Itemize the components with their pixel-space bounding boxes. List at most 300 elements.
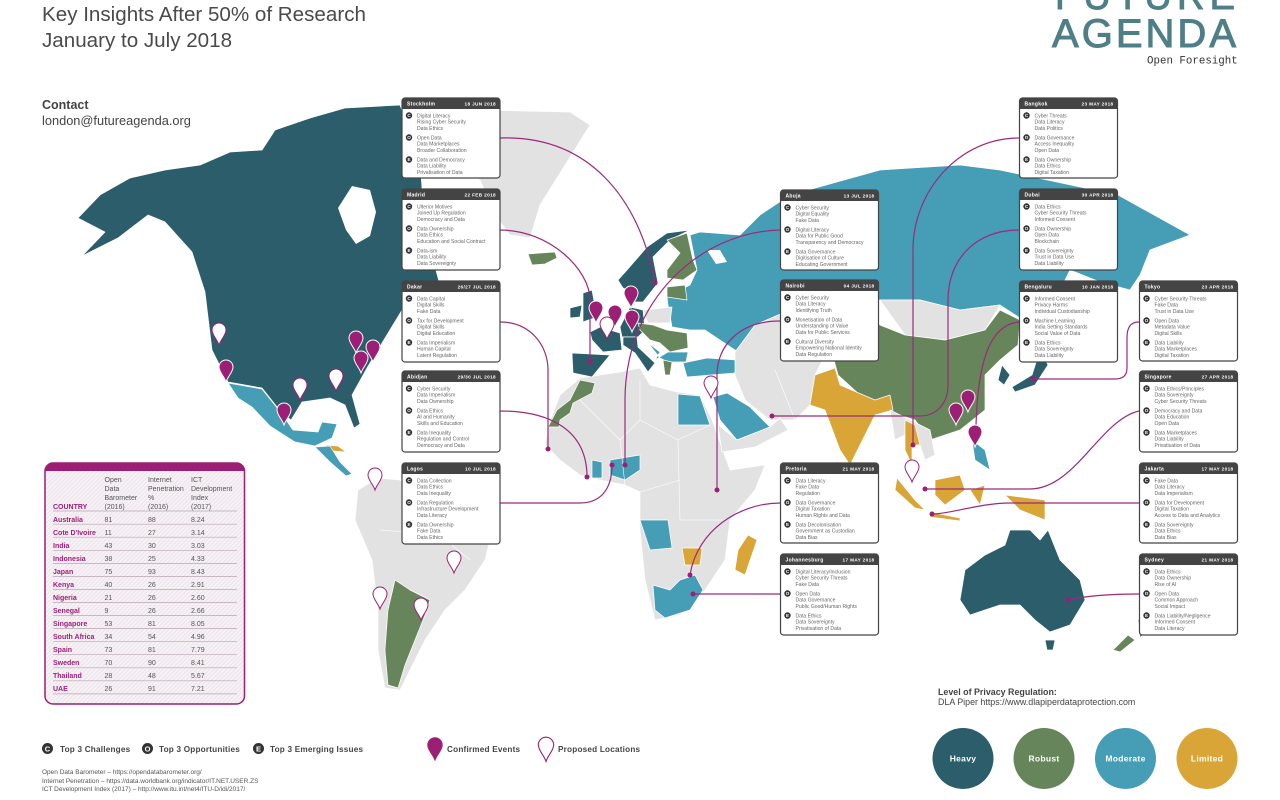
region: France	[590, 327, 622, 352]
region: New Zealand	[1113, 618, 1148, 652]
panel: Jakarta: Fake Data	[1154, 478, 1178, 484]
panel: Jakarta: C	[1145, 478, 1149, 483]
panel: country data table: Internet	[148, 477, 172, 484]
panel: Nairobi: Data for Public Services	[796, 330, 850, 336]
region: Zimbabwe	[682, 548, 702, 565]
panel: Tokyo: Trust in Data Use	[1154, 309, 1194, 315]
legend: pin types	[427, 737, 641, 761]
panel: Singapore: 27 APR 2018	[1202, 375, 1234, 380]
panel: Stockholm: Data Ethics	[417, 126, 443, 132]
panel: Madrid: Data Liability	[417, 255, 447, 261]
region: Indonesia	[895, 475, 1045, 521]
panel: Bangkok: Data Ownership	[1034, 157, 1071, 163]
panel: Sydney: O	[1145, 591, 1149, 596]
region: India	[810, 368, 893, 465]
panel: country data table: 43	[104, 543, 112, 550]
panel: country data table	[45, 463, 244, 704]
panel: country data table: Sweden	[53, 660, 79, 667]
legend: Robust	[1014, 728, 1074, 789]
panel: Dakar: Data Capital	[417, 296, 445, 302]
panel: Lagos: Data Ethics	[417, 485, 443, 491]
panel: Dakar: Digital Skills	[417, 325, 445, 331]
panel: Tokyo	[1140, 281, 1238, 361]
panel: Madrid: E	[407, 248, 411, 253]
panel: Nairobi: 04 JUL 2018	[844, 284, 875, 289]
panel: country data table: 75	[104, 569, 112, 576]
panel: Sydney: C	[1145, 569, 1149, 574]
panel: Madrid: Ulterior Motives	[417, 204, 453, 210]
panel: Bangkok	[1020, 98, 1118, 178]
panel: Tokyo: Fake Data	[1154, 303, 1178, 309]
region: Middle East and Central Asia	[735, 295, 860, 420]
panel: country data table: 34	[104, 634, 112, 641]
panel: Bangkok: Cyber Threats	[1034, 113, 1067, 119]
panel: Tokyo: 23 APR 2018	[1202, 285, 1234, 290]
panel: country data table: 38	[104, 556, 112, 563]
panel: Singapore: Data Marketplaces	[1154, 430, 1197, 436]
contact	[42, 98, 191, 128]
panel: country data table: 28	[104, 673, 112, 680]
title: January to July 2018	[42, 29, 232, 52]
panel: country data table: 48	[148, 673, 156, 680]
panel: Bengaluru: E	[1025, 340, 1028, 345]
panel: Bengaluru: Bengaluru	[1024, 285, 1052, 291]
panel: country data table: %	[148, 495, 154, 502]
panel: Pretoria: Government as Custodian	[796, 529, 855, 535]
panel: country data table: 26	[148, 582, 156, 589]
panel: Lagos: Data Ethics	[417, 535, 443, 541]
panel: country data table: Penetration	[148, 486, 184, 493]
panel: Lagos: 10 JUL 2018	[465, 467, 496, 472]
region: Spain	[572, 353, 610, 377]
panel: Nairobi: Cyber Security	[796, 295, 829, 301]
panel: Dubai: 30 APR 2018	[1082, 193, 1114, 198]
panel: country data table: 4.33	[191, 556, 205, 563]
region: Morocco	[548, 380, 595, 427]
panel: Abuja	[780, 190, 878, 270]
panel: Madrid: Data Sovereignty	[417, 261, 457, 267]
panel: Madrid: Madrid	[407, 193, 425, 199]
panel: country data table: 8.24	[191, 517, 205, 524]
panel: Lagos	[402, 463, 500, 544]
panel: Dakar: E	[407, 340, 411, 345]
region: Poland and Baltics	[643, 307, 672, 323]
panel: Lagos: C	[407, 478, 411, 483]
panel: Stockholm: E	[407, 157, 411, 162]
panel: Stockholm	[402, 98, 500, 178]
footnotes: sources: Open Data Barometer – https://opendatabarometer.org/	[42, 769, 202, 776]
panel: Nairobi: E	[786, 339, 789, 344]
panel: Pretoria: Regulation	[796, 491, 820, 497]
panel: Lagos: E	[407, 522, 411, 527]
panel: Nairobi: O	[786, 317, 790, 322]
panel: Abuja: 13 JUL 2018	[844, 194, 875, 199]
panel: country data table: 91	[148, 686, 156, 693]
title: Key Insights After 50% of Research	[42, 3, 366, 26]
panel: Lagos: Infrastructure Development	[417, 507, 479, 513]
panel: Dubai: E	[1025, 248, 1028, 253]
panel: country data table: 26	[148, 595, 156, 602]
panel: country data table: 8.41	[191, 660, 205, 667]
region: Ireland	[570, 305, 582, 318]
panel: country data table: 11	[104, 530, 112, 537]
panel: Nairobi	[780, 280, 878, 361]
panel: country data table: 90	[148, 660, 156, 667]
panel: Bangkok: O	[1025, 135, 1029, 140]
panel: Johannesburg: Data Governance	[796, 598, 836, 604]
panel: Bengaluru: 10 JAN 2018	[1082, 285, 1114, 290]
panel: Singapore: Data Ethics/Principles	[1154, 386, 1204, 392]
region: Cote d'Ivoire	[592, 460, 602, 478]
contact: london@futureagenda.org	[42, 113, 191, 128]
panel: country data table: 81	[148, 621, 156, 628]
panel: Lagos: Data Ownership	[417, 522, 454, 528]
panel: Bangkok: Data Governance	[1034, 135, 1075, 141]
panel: Dakar: 26/27 JUL 2018	[458, 285, 496, 290]
region: Iceland	[528, 252, 557, 265]
panel: Bangkok: E	[1025, 157, 1028, 162]
panel: Dakar: O	[407, 318, 411, 323]
region: Egypt	[678, 394, 710, 425]
panel: Lagos: Fake Data	[417, 529, 441, 535]
panel: country data table: 8.43	[191, 569, 205, 576]
panel: Pretoria: O	[786, 500, 790, 505]
panel: Nairobi: Cultural Diversity	[796, 339, 834, 345]
panel: Jakarta: Data Ethics	[1154, 529, 1181, 535]
panel: Sydney: Informed Consent	[1154, 620, 1196, 626]
panel: country data table: 5.67	[191, 673, 205, 680]
panel: country data table: Senegal	[53, 608, 80, 615]
panel: Abidjan: Cyber Security	[417, 386, 451, 392]
panel: Madrid: Joined Up Regulation	[417, 211, 466, 217]
panel: Sydney: Data Ownership	[1154, 576, 1191, 582]
panel: Singapore: Cyber Security Threats	[1154, 399, 1207, 405]
panel: Bangkok: Access Inequality	[1034, 142, 1075, 148]
panel: Dakar: Human Capital	[417, 347, 451, 353]
panel: Bengaluru: O	[1025, 318, 1029, 323]
panel: Stockholm: Rising Cyber Security	[417, 120, 466, 126]
panel: Abuja: O	[786, 227, 790, 232]
panel: Tokyo: E	[1145, 340, 1148, 345]
panel: Abidjan: Data Ethics	[417, 408, 443, 414]
panel: Jakarta: O	[1145, 500, 1149, 505]
panel: Pretoria: C	[786, 478, 790, 483]
panel: Bengaluru: Data Liability	[1034, 353, 1064, 359]
panel: Jakarta: Jakarta	[1144, 467, 1164, 473]
world map	[78, 105, 1190, 690]
panel: Tokyo: Data Marketplaces	[1154, 347, 1197, 353]
panel: Pretoria: Data Decolonisation	[796, 522, 841, 528]
panel: Johannesburg: Fake Data	[796, 582, 819, 588]
logo: Future Agenda: Open Foresight	[1147, 56, 1238, 68]
region: Greenland	[430, 110, 590, 238]
panel: Nairobi: Monetisation of Data	[796, 317, 842, 323]
legend: Top 3 categories	[42, 743, 363, 754]
legend: Limited	[1176, 728, 1238, 789]
panel: Dakar: Digital Skills	[417, 303, 445, 309]
region: Central Europe	[638, 323, 688, 352]
panel: Johannesburg: Privatisation of Data	[796, 626, 841, 632]
legend: Top 3 categories: Top 3 Opportunities	[159, 745, 240, 754]
panel: Stockholm: C	[407, 113, 411, 118]
panel: Jakarta: 17 MAY 2018	[1202, 467, 1234, 472]
panel: Singapore	[1140, 371, 1238, 452]
panel: Sydney: Data Literacy	[1154, 626, 1185, 632]
panel: Johannesburg: Open Data	[796, 591, 820, 597]
panel: Johannesburg	[780, 554, 878, 635]
panel: Sydney: Open Data	[1154, 591, 1179, 597]
panel: Bengaluru: Data Ethics	[1034, 340, 1061, 346]
panel: Madrid: C	[407, 204, 411, 209]
region: Southeast Asia	[890, 410, 935, 460]
panel: country data table: 70	[104, 660, 112, 667]
panel: Sydney: E	[1145, 613, 1148, 618]
panel: Jakarta: Data for Development	[1154, 500, 1205, 506]
panel: Abuja: C	[786, 205, 790, 210]
panel: Singapore: Open Data	[1154, 421, 1179, 427]
panel: country data table: 7.21	[191, 686, 205, 693]
panel: Pretoria: Data Governance	[796, 500, 836, 506]
panel: Bangkok: Bangkok	[1024, 102, 1048, 108]
panel: Nairobi: Empowering National Identity	[796, 346, 862, 352]
region: China	[830, 305, 1020, 440]
panel: Sydney: Rise of AI	[1154, 582, 1176, 588]
panel: Madrid: Data Ownership	[417, 226, 454, 232]
panel: Jakarta	[1140, 463, 1238, 543]
panel: country data table: 27	[148, 530, 156, 537]
panel: country data table: Australia	[53, 517, 83, 524]
panel: Jakarta: Digital Taxation	[1154, 507, 1189, 513]
panel: Sydney: Social Impact	[1154, 604, 1186, 610]
panel: country data table: South Africa	[53, 634, 94, 641]
panel: Lagos: Lagos	[407, 467, 423, 473]
connector lines from boxes to cities	[500, 138, 1139, 602]
legend: Top 3 categories: O	[145, 744, 151, 753]
panel: Abidjan: Skills and Education	[417, 421, 463, 427]
region: Balkans	[648, 343, 688, 362]
legend: Robust: Robust	[1028, 754, 1060, 764]
panel: Sydney: Common Approach	[1154, 598, 1198, 604]
panel: Tokyo: Tokyo	[1144, 285, 1160, 291]
panel: country data table: 2.60	[191, 595, 205, 602]
panel: Stockholm: Digital Literacy	[417, 113, 451, 119]
panel: country data table: Development	[191, 486, 232, 493]
region: Greece	[663, 360, 672, 375]
panel: Abidjan: 29/30 JUL 2018	[458, 375, 496, 380]
panel: Sydney: Data Liability/Negligence	[1154, 613, 1211, 619]
panel: Tokyo: Data Liability	[1154, 340, 1184, 346]
panel: Bengaluru: Data Sovereignty	[1034, 347, 1074, 353]
panel: country data table: Data	[104, 486, 119, 493]
region: Turkey	[683, 358, 737, 377]
panel: Tokyo: Cyber Security Threats	[1154, 296, 1207, 302]
panel: Nairobi: Nairobi	[786, 284, 805, 290]
legend: Limited: Limited	[1191, 754, 1223, 764]
panel: Pretoria: Data Literacy	[796, 478, 826, 484]
panel: Johannesburg: Public Good/Human Rights	[796, 604, 857, 610]
panel: Dakar: Tax for Development	[417, 318, 464, 324]
panel: country data table: Indonesia	[53, 556, 86, 563]
panel: country data table: 2.91	[191, 582, 205, 589]
panel: Sydney: Data Ethics	[1154, 569, 1181, 575]
region: Scandinavia	[618, 230, 690, 302]
title	[42, 3, 366, 52]
panel: Sydney: Sydney	[1144, 558, 1164, 564]
region: Russia and Eastern Europe	[667, 165, 1190, 357]
panel: country data table: 93	[148, 569, 156, 576]
logo: Future Agenda	[1052, 0, 1238, 68]
region: Central America	[315, 446, 352, 476]
panel: Bangkok: 23 MAY 2018	[1082, 102, 1114, 107]
panel: Jakarta: Access to Data and Analytics	[1154, 513, 1221, 519]
panel: Bengaluru: Individual Custodianship	[1034, 309, 1090, 315]
region: South America	[355, 478, 490, 690]
panel: country data table: 9	[104, 608, 108, 615]
panel: Nairobi: Identifying Truth	[796, 308, 832, 314]
panel: Abuja: Digital Equality	[796, 212, 830, 218]
panel: Abuja: Fake Data	[796, 218, 819, 224]
footnotes: sources: ICT Development Index (2017) – http://www.itu.int/net4/ITU-D/idi/2017/	[42, 786, 245, 793]
panel: Dubai: O	[1025, 226, 1029, 231]
panel: Dubai	[1020, 189, 1118, 270]
panel: Pretoria: Digital Taxation	[796, 507, 830, 513]
legend: pin types: Confirmed Events	[447, 745, 521, 754]
panel: Lagos: O	[407, 500, 411, 505]
region: Philippines	[972, 440, 990, 470]
panel: Bangkok: Data Literacy	[1034, 120, 1065, 126]
panel: Dubai: Data Ownership	[1034, 226, 1071, 232]
panel: country data table: COUNTRY	[53, 504, 88, 511]
panel: Dubai: Informed Consent	[1034, 217, 1076, 223]
panel: Stockholm: Stockholm	[407, 102, 436, 108]
legend: Top 3 categories: Top 3 Challenges	[60, 745, 131, 754]
panel: Abuja: Transparency and Democracy	[796, 240, 864, 246]
panel: Singapore: Singapore	[1144, 375, 1172, 381]
panel: Johannesburg: Cyber Security Threats	[796, 576, 848, 582]
panel: Bangkok: Digital Taxation	[1034, 170, 1069, 176]
region: Africa	[545, 368, 765, 620]
panel: country data table: 3.14	[191, 530, 205, 537]
panel: country data table: 88	[148, 517, 156, 524]
panel: Dubai: Data Ethics	[1034, 204, 1061, 210]
panel: Dakar: Fake Data	[417, 309, 441, 315]
panel: Madrid: Democracy and Data	[417, 217, 465, 223]
panel: Pretoria: Data Bias	[796, 535, 818, 541]
panel: Pretoria	[780, 463, 878, 543]
panel: Madrid	[402, 189, 500, 270]
panel: country data table: (2017)	[191, 504, 211, 511]
region: Finland	[667, 233, 697, 280]
panel: country data table: UAE	[53, 686, 68, 693]
panel: Dubai: Blockchain	[1034, 239, 1059, 245]
panel: Dakar: Digital Education	[417, 331, 455, 337]
panel: Abidjan	[402, 371, 500, 452]
panel: Abidjan: Data Inequality	[417, 430, 451, 436]
panel: Stockholm: 18 JUN 2018	[465, 102, 496, 107]
panel: country data table: 25	[148, 556, 156, 563]
panel: Nairobi: Data Regulation	[796, 352, 832, 358]
panel: Abuja: Cyber Security	[796, 205, 829, 211]
panel: Tokyo: Metadata Value	[1154, 325, 1190, 331]
panel: Jakarta: E	[1145, 522, 1148, 527]
panel: Singapore: Data Sovereignty	[1154, 393, 1194, 399]
panel: country data table: 53	[104, 621, 112, 628]
legend: Moderate: Moderate	[1105, 754, 1146, 764]
panel: Dakar: Data Imperialism	[417, 340, 455, 346]
panel: Tokyo: Open Data	[1154, 318, 1179, 324]
panel: Tokyo: Digital Skills	[1154, 331, 1182, 337]
panel: Lagos: Data Literacy	[417, 513, 447, 519]
panel: country data table: 26	[104, 686, 112, 693]
region: Hudson Bay	[338, 186, 376, 244]
panel: Bangkok: Data Ethics	[1034, 164, 1061, 170]
panel: country data table: Index	[191, 495, 209, 502]
panel: Tokyo: Digital Taxation	[1154, 353, 1189, 359]
panel: country data table: Barometer	[104, 495, 138, 502]
panel: Sydney: 21 MAY 2018	[1202, 558, 1234, 563]
panel: country data table: 81	[148, 647, 156, 654]
region: Germany and Benelux	[620, 307, 645, 337]
panel: Sydney	[1140, 554, 1238, 635]
region: Tasmania	[1045, 640, 1055, 650]
panel: country data table: Nigeria	[53, 595, 77, 602]
legend: Moderate	[1095, 728, 1156, 789]
panel: Johannesburg: C	[786, 569, 790, 574]
panel: Dubai: Data Liability	[1034, 261, 1064, 267]
panel: Bangkok: Data Politics	[1034, 126, 1063, 132]
panel: Stockholm: Data and Democracy	[417, 157, 465, 163]
panel: Tokyo: C	[1145, 296, 1149, 301]
panel: Singapore: Democracy and Data	[1154, 408, 1203, 414]
region: Argentina	[385, 580, 430, 688]
panel: Madrid: 22 FEB 2018	[465, 193, 496, 198]
panel: Lagos: Data Inequality	[417, 491, 451, 497]
panel: Abidjan: O	[407, 408, 411, 413]
panel: Dubai: Trust in Data Use	[1034, 255, 1074, 261]
legend: Heavy: Heavy	[950, 754, 976, 764]
legend: Top 3 categories: Top 3 Emerging Issues	[270, 745, 363, 754]
legend: pin types: Proposed Locations	[558, 745, 641, 754]
panel: Jakarta: Data Sovereignty	[1154, 522, 1194, 528]
panel: Bengaluru: Social Value of Data	[1034, 331, 1080, 337]
panel: Abidjan: Abidjan	[407, 375, 427, 381]
panel: Dakar: Latent Regulation	[417, 353, 457, 359]
panel: country data table: Cote D'Ivoire	[53, 530, 96, 537]
panel: Johannesburg: Johannesburg	[786, 558, 824, 564]
panel: Madrid: Data-ism	[417, 248, 437, 254]
panel: Dubai: Open Data	[1034, 233, 1059, 239]
panel: country data table: 73	[104, 647, 112, 654]
logo: Future Agenda: AGENDA	[1052, 12, 1236, 56]
panel: country data table: Open	[104, 477, 122, 484]
legend: Top 3 categories: E	[256, 744, 261, 753]
panel: Lagos: Data Collection	[417, 478, 452, 484]
panel: Abuja: Digitisation of Culture	[796, 256, 844, 262]
panel: Bengaluru: Privacy Harms	[1034, 303, 1068, 309]
panel: country data table: 30	[148, 543, 156, 550]
panel: country data table: India	[53, 543, 69, 550]
panel: Johannesburg: 17 MAY 2018	[842, 558, 875, 563]
panel: Abidjan: Data Ownership	[417, 399, 454, 405]
panel: Nairobi: Data Literacy	[796, 302, 826, 308]
region: Mongolia	[880, 300, 1000, 340]
panel: Stockholm: Broader Collaboration	[417, 148, 467, 154]
panel: Pretoria: 21 MAY 2018	[842, 467, 875, 472]
panel: country data table: 7.79	[191, 647, 205, 654]
panel: Johannesburg: O	[786, 591, 790, 596]
panel: Stockholm: Open Data	[417, 135, 442, 141]
panel: Bengaluru: Machine Learning	[1034, 318, 1075, 324]
